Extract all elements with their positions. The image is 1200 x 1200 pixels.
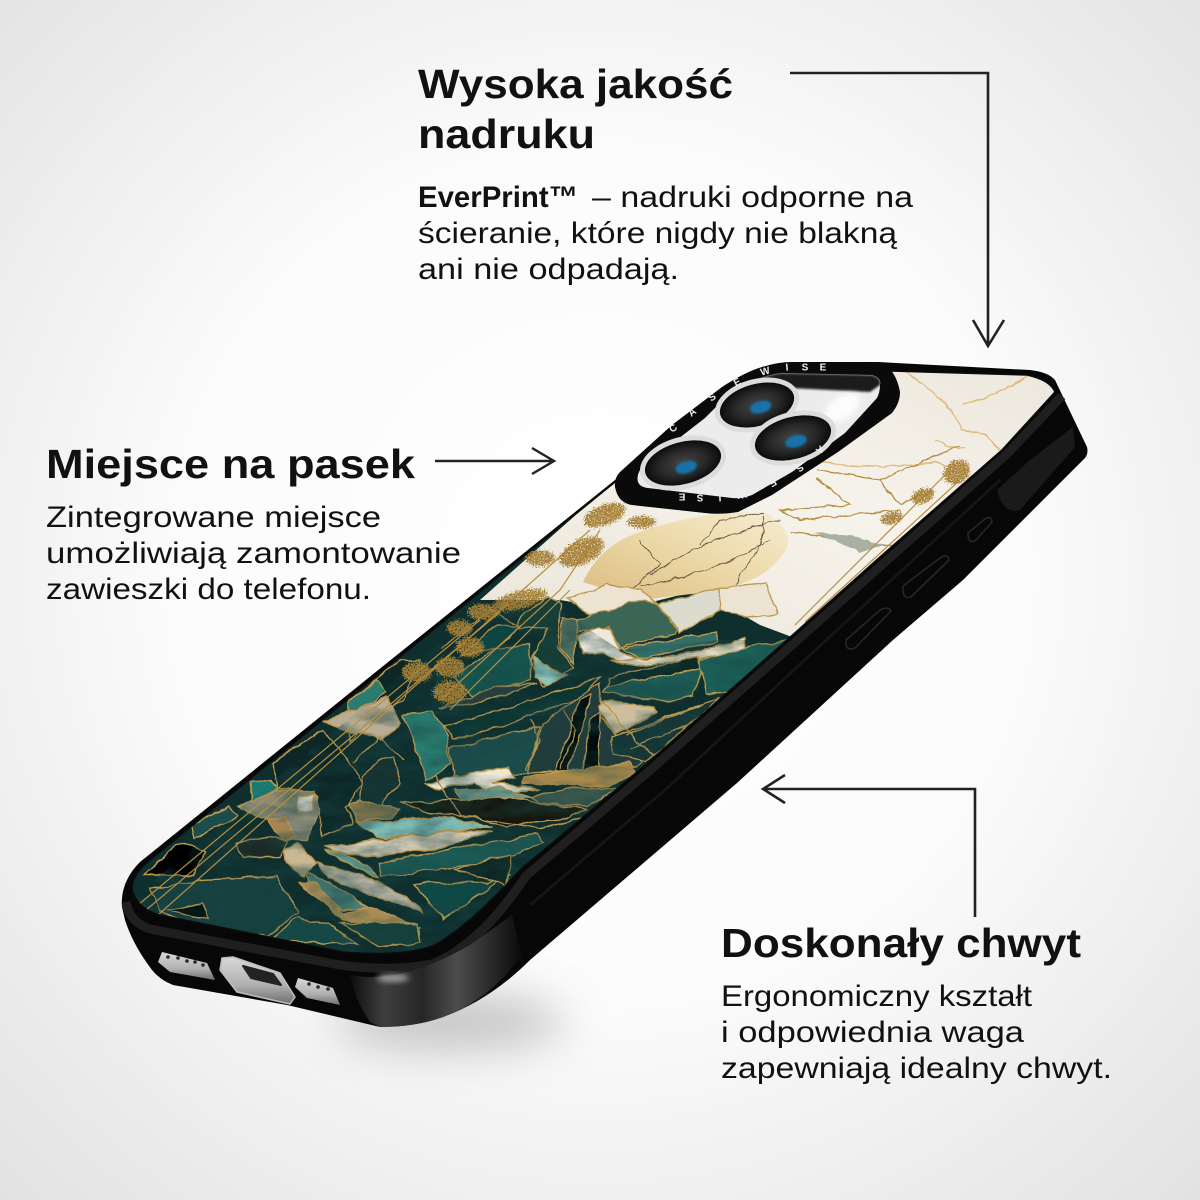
arrow: print quality	[790, 73, 1004, 346]
dark grey band	[440, 683, 537, 707]
opening inner wall	[728, 373, 880, 402]
ring branding CASEWISE: E	[767, 476, 778, 489]
green speckle strip	[530, 787, 617, 807]
bottom centre	[270, 917, 357, 945]
cream rock centre	[283, 843, 317, 877]
camera ring	[615, 362, 900, 514]
black speckled band	[400, 797, 587, 827]
charging port	[220, 957, 295, 1004]
left speaker	[158, 952, 215, 980]
ring branding CASEWISE: A	[813, 443, 826, 456]
ring branding CASEWISE: E	[820, 362, 827, 374]
moon cracks	[630, 512, 780, 590]
heading block: print quality	[418, 61, 913, 286]
bottom ports	[158, 952, 340, 1005]
ring branding CASEWISE: S	[696, 492, 703, 502]
rim groove	[530, 480, 1000, 905]
body text: grip: i odpowiednia waga	[721, 1016, 1024, 1049]
phone case	[100, 350, 1100, 1027]
gold tree foliage	[402, 455, 975, 703]
body text: strap slot: zawieszki do telefonu.	[46, 573, 371, 606]
teal grey band	[622, 632, 717, 658]
heading block: strap slot	[46, 441, 461, 606]
teal panel	[403, 710, 450, 780]
black stripes	[555, 695, 600, 772]
pale peak	[655, 588, 720, 632]
left black	[145, 843, 205, 875]
corner sheen	[350, 915, 522, 1027]
teal dark left	[462, 625, 520, 655]
ring branding CASEWISE: E	[732, 376, 743, 389]
teal right bottom	[413, 873, 510, 920]
teal grey mountain	[450, 727, 540, 777]
volume down button	[846, 608, 891, 649]
light teal band	[357, 817, 493, 838]
teal middle	[303, 870, 367, 910]
light teal wedge	[323, 850, 377, 877]
diagonal gold lines	[138, 470, 965, 915]
dark speckle	[237, 837, 287, 857]
ring branding CASEWISE: I	[785, 362, 789, 374]
light teal pool	[533, 657, 567, 685]
heading: Wysoka jakość nadruku	[418, 61, 733, 157]
heading block: grip	[721, 920, 1112, 1085]
mountain shapes	[145, 583, 790, 947]
ring branding CASEWISE: C	[833, 425, 846, 438]
lens left	[634, 426, 732, 500]
lens right	[744, 401, 842, 475]
bottom teal area	[150, 877, 297, 937]
corner reflection	[377, 974, 409, 982]
teal upper	[350, 680, 387, 712]
marble strata grey	[815, 533, 885, 552]
marble sky	[480, 365, 1060, 640]
body text: EverPrint: ścieranie, które nigdy nie blakną	[418, 217, 897, 250]
side notch	[997, 427, 1075, 511]
dark green ridge	[517, 597, 573, 687]
cream peaks	[566, 583, 777, 620]
teal right	[700, 640, 790, 693]
sage strip	[457, 787, 530, 803]
camera plate highlight	[819, 388, 865, 428]
action button	[968, 518, 992, 541]
ring branding CASEWISE: W	[759, 365, 772, 379]
tan rock	[597, 700, 657, 733]
lower right green	[613, 697, 720, 762]
cream band	[610, 638, 745, 666]
ring branding CASEWISE: E	[678, 490, 685, 502]
dark band right	[607, 657, 703, 687]
body text: EverPrint: – nadruki odporne na	[592, 181, 913, 214]
heading: Wysoka jakość nadruku: nadruku	[418, 111, 595, 157]
right speaker	[295, 978, 340, 1005]
ring branding CASEWISE: A	[686, 406, 699, 419]
dark base	[132, 515, 790, 953]
watercolour texture	[130, 610, 800, 960]
grey rock	[237, 790, 320, 840]
ring branding CASEWISE: S	[793, 461, 805, 474]
ring branding CASEWISE: S	[802, 362, 809, 374]
dark green base	[340, 923, 420, 947]
gold rock	[300, 883, 420, 927]
arrow: strap slot	[435, 448, 554, 474]
glossy rim	[126, 396, 1062, 968]
body text: strap slot: Zintegrowane miejsce	[46, 501, 381, 534]
phone shadow	[335, 994, 565, 1050]
side buttons	[846, 427, 1075, 649]
teal right lower	[380, 835, 543, 877]
gold contour extras	[353, 610, 780, 830]
body text: strap slot: umożliwiają zamontowanie	[46, 537, 461, 570]
teal big	[453, 645, 530, 697]
marble shadow veins	[820, 372, 1028, 480]
body text: EverPrint: EverPrint™	[418, 181, 578, 214]
striped mountain	[527, 683, 643, 773]
camera opening	[638, 373, 880, 498]
small black tri	[455, 855, 510, 885]
case printed art	[132, 372, 1054, 953]
art inner rim	[132, 371, 1055, 953]
arrow: grip	[763, 775, 975, 917]
body text: grip	[721, 980, 1112, 1085]
volume up button	[903, 556, 949, 598]
cream band lower	[323, 832, 493, 857]
ring branding CASEWISE: I	[718, 491, 722, 503]
upper left black	[350, 660, 420, 740]
heading: Wysoka jakość nadruku: Wysoka jakość	[418, 61, 733, 107]
body text: EverPrint: ani nie odpadają.	[418, 253, 679, 286]
teal speck	[250, 780, 277, 800]
heading: Miejsce na pasek: Miejsce na pasek	[46, 441, 415, 487]
case body	[122, 362, 1088, 1027]
cream diagonal	[318, 862, 423, 913]
lens top	[709, 369, 805, 441]
dark teal band	[443, 677, 600, 740]
ring body	[615, 362, 900, 514]
body text: strap slot	[46, 501, 461, 606]
ring branding CASEWISE: W	[736, 488, 747, 500]
heading: Doskonały chwyt: Doskonały chwyt	[721, 920, 1081, 966]
bottom black	[167, 903, 210, 920]
dark stripe block	[360, 757, 400, 807]
sage mountain	[577, 600, 677, 647]
ring branding CASEWISE: S	[707, 391, 719, 404]
sage thin	[560, 617, 577, 663]
teal band right	[603, 667, 703, 700]
tan block	[350, 800, 400, 823]
marble gold strata	[780, 445, 960, 550]
cream sand band	[427, 767, 540, 793]
body text: grip: zapewniają idealny chwyt.	[721, 1052, 1112, 1085]
gold rock small	[267, 817, 297, 840]
gold band	[523, 763, 637, 787]
cream rock	[577, 627, 637, 663]
light rock	[297, 793, 313, 813]
beige rock top	[323, 697, 400, 740]
body text: grip: Ergonomiczny kształt	[721, 980, 1033, 1013]
ring branding CASEWISE: C	[667, 422, 680, 435]
moon	[583, 513, 788, 600]
ring branding CASEWISE	[667, 362, 846, 503]
body text: EverPrint	[418, 181, 913, 286]
teal dark left	[190, 807, 237, 840]
dark upper left	[273, 730, 363, 837]
